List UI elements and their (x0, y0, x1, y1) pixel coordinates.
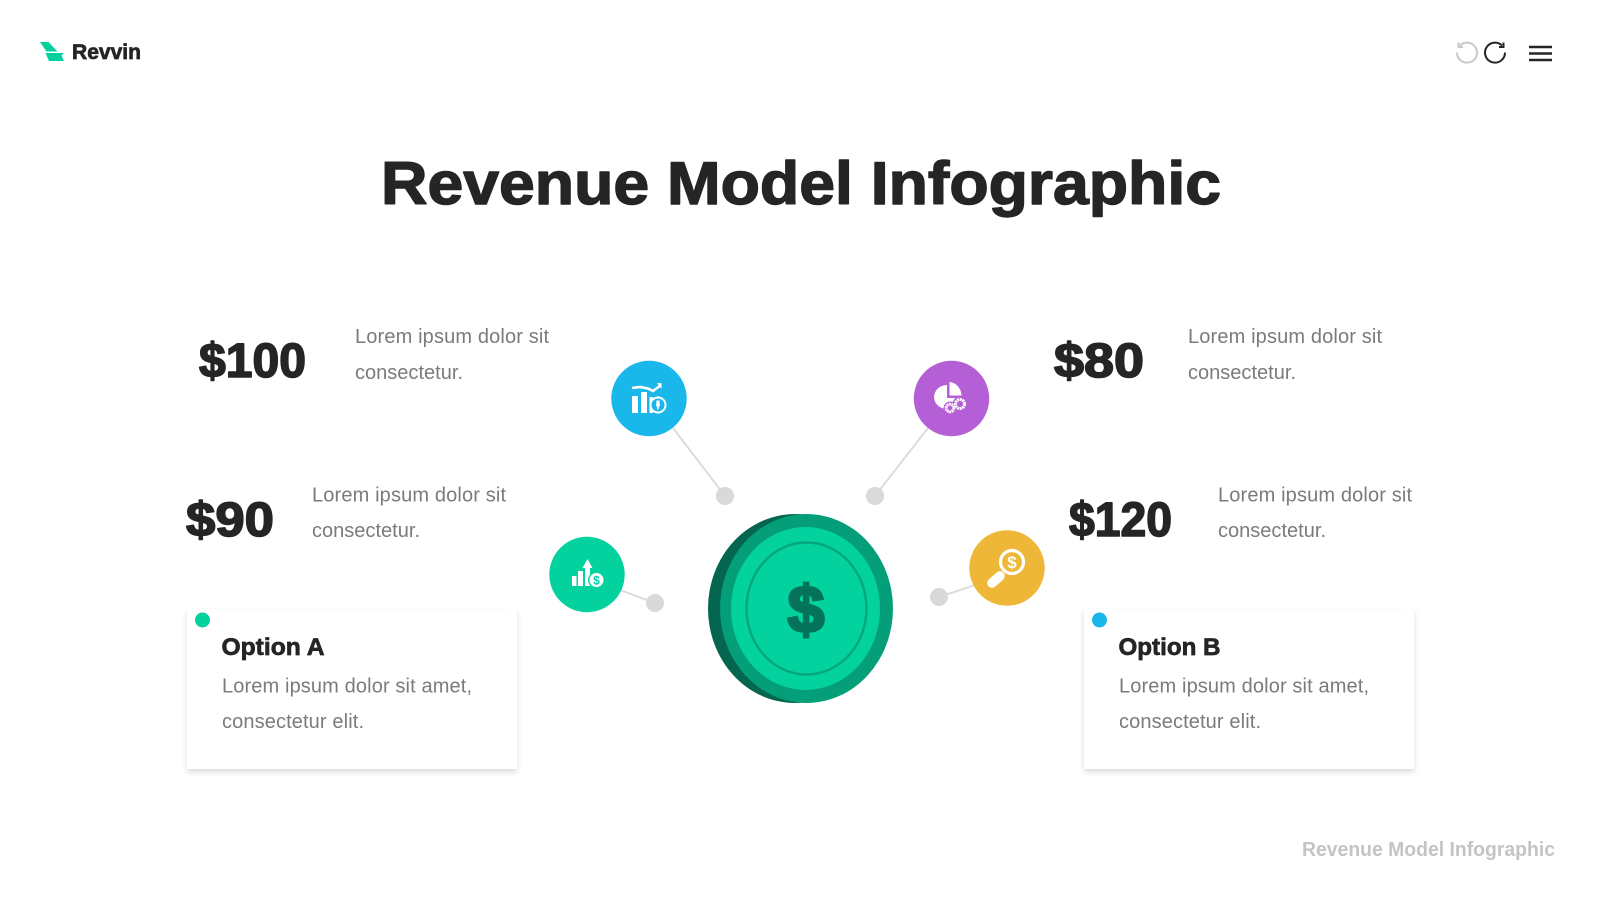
description line 2: consectetur. (312, 520, 420, 542)
icon: green growth circle: $ (593, 574, 600, 588)
card text: Lorem ipsum dolor sit amet, (1119, 676, 1369, 698)
coin rim (720, 514, 893, 703)
value block: $120 (1069, 484, 1412, 547)
card background (1084, 609, 1414, 769)
icon: green growth circle (549, 537, 625, 612)
icon: redo (1485, 42, 1505, 63)
icon: menu (1529, 47, 1552, 60)
card text: Lorem ipsum dolor sit amet, (222, 676, 472, 698)
value: $90 (186, 494, 274, 547)
central coin (708, 514, 893, 703)
card heading: Option A (222, 634, 324, 661)
value: $120 (1069, 494, 1172, 547)
logo (40, 41, 141, 64)
title: Revenue Model Infographic (381, 150, 1221, 217)
card heading: Option B (1118, 634, 1220, 661)
description: Lorem ipsum dolor sit (312, 484, 506, 506)
brand name: Revvin (72, 41, 141, 64)
panel: option A (187, 609, 517, 769)
marker dot (1092, 612, 1107, 628)
value block: $90 (186, 484, 506, 547)
panel: option B (1084, 609, 1414, 769)
toolbar icons (1457, 42, 1552, 63)
description: Lorem ipsum dolor sit (355, 326, 549, 348)
value block: $100 (199, 326, 549, 388)
description: Lorem ipsum dolor sit (1188, 326, 1382, 348)
description: Lorem ipsum dolor sit (1218, 484, 1412, 506)
coin face (731, 527, 880, 690)
value block: $80 (1054, 326, 1382, 388)
footer caption: Revenue Model Infographic (1302, 839, 1555, 861)
card background (187, 609, 517, 769)
icon: yellow magnifier circle: $ (1007, 553, 1017, 572)
icon: yellow magnifier circle (969, 530, 1045, 606)
dollar sign: $ (788, 572, 824, 646)
connector: green (620, 590, 664, 612)
coin edge (708, 514, 882, 703)
card text line 2: consectetur elit. (222, 711, 364, 733)
description line 2: consectetur. (355, 362, 463, 384)
card text line 2: consectetur elit. (1119, 711, 1261, 733)
description line 2: consectetur. (1218, 520, 1326, 542)
icon: blue chart circle (611, 361, 687, 436)
value: $80 (1054, 335, 1144, 388)
icon: purple pie circle (914, 361, 989, 436)
connector: purple (866, 428, 928, 505)
marker dot (195, 612, 210, 628)
value: $100 (199, 335, 306, 388)
icon: logo mark (40, 42, 64, 61)
connector: yellow (930, 585, 975, 606)
coin ring (746, 542, 866, 674)
icon: undo (1457, 42, 1477, 63)
description line 2: consectetur. (1188, 362, 1296, 384)
connector: blue (673, 428, 734, 505)
